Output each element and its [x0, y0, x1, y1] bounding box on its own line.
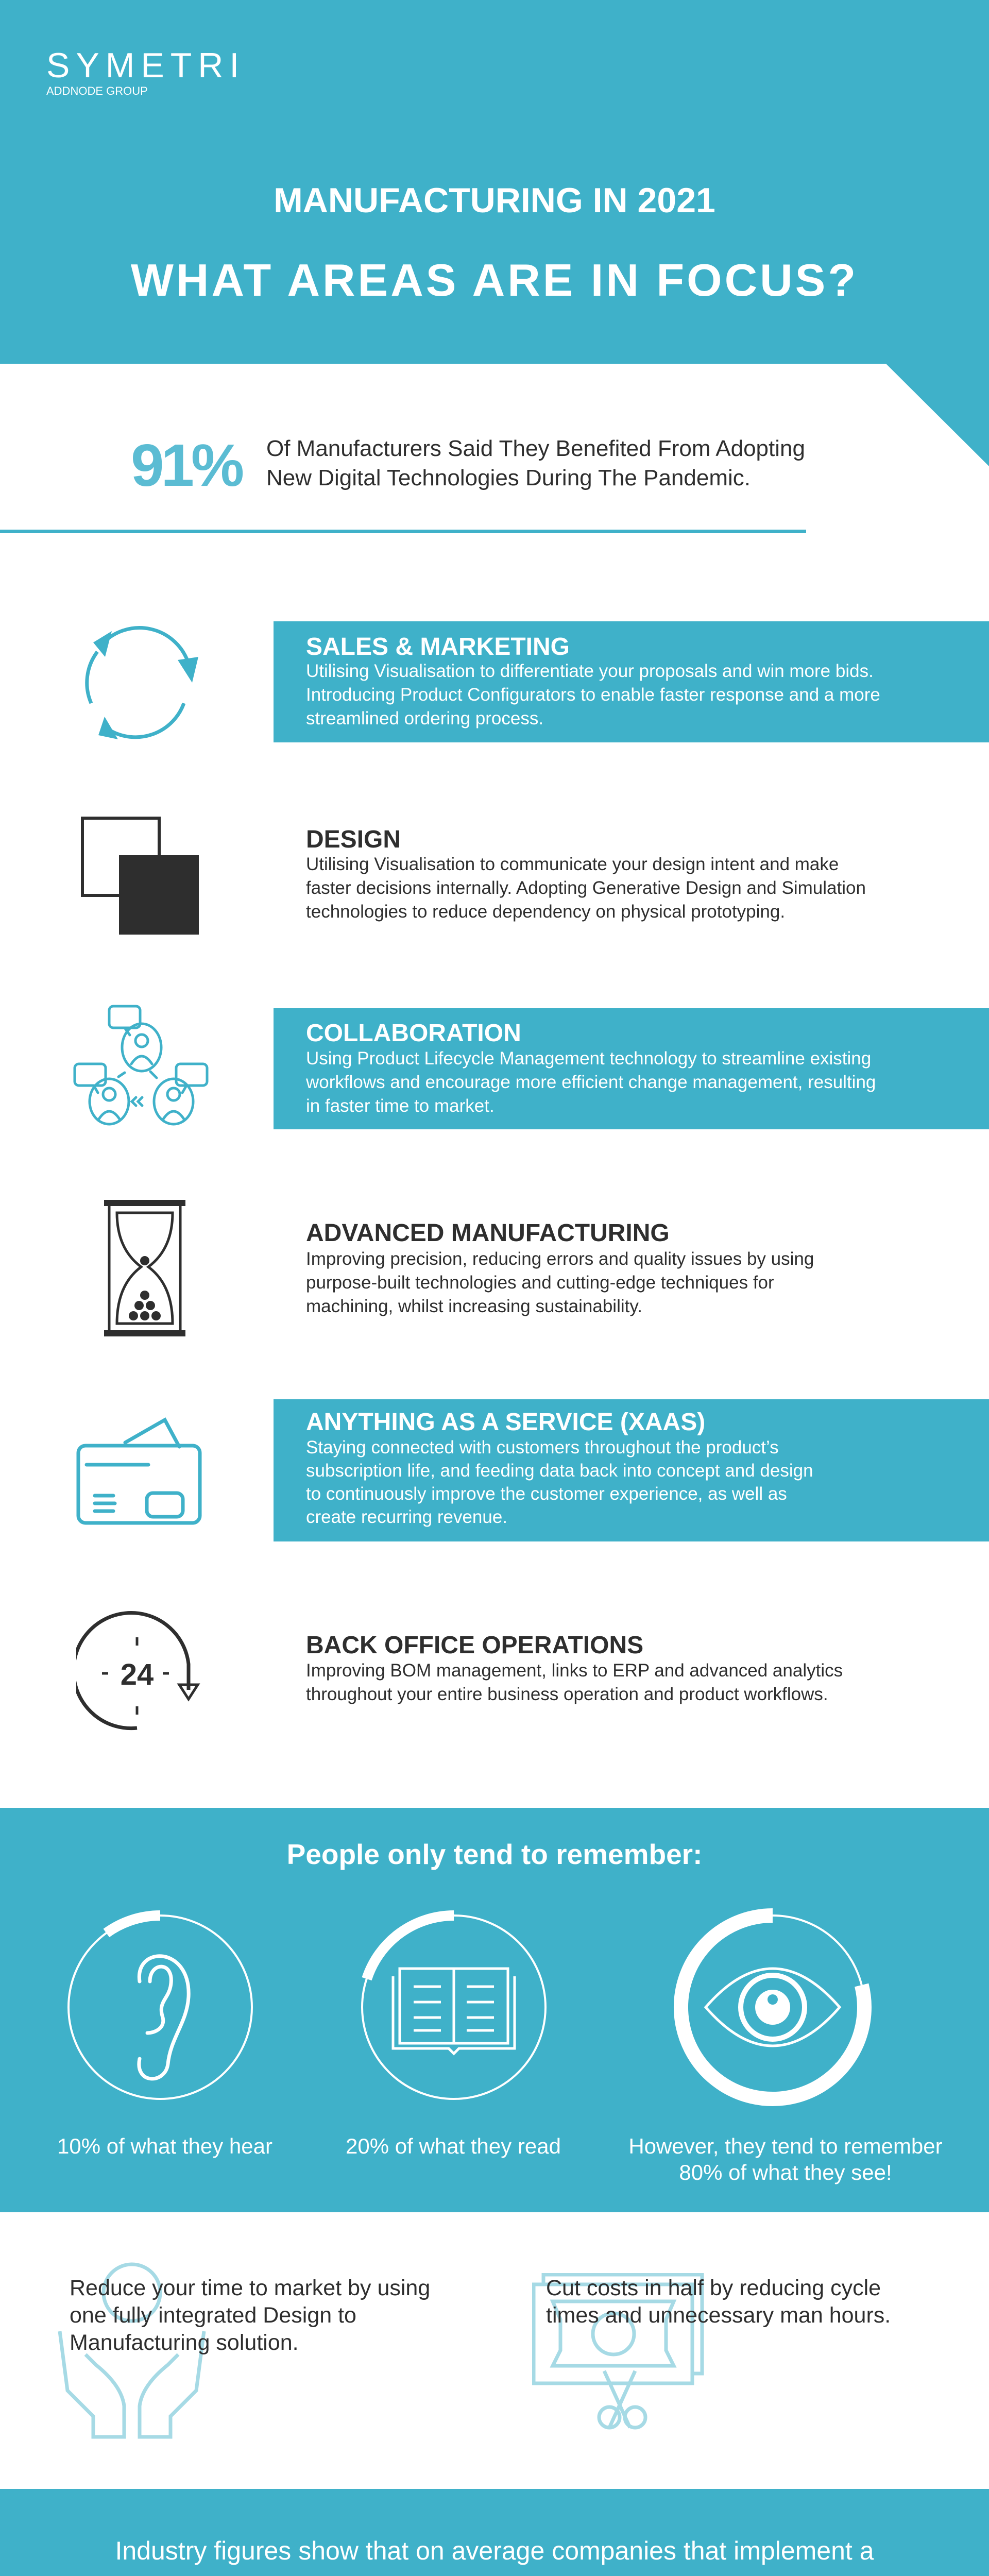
- icon: 24 clock: 24: [121, 1658, 154, 1691]
- panel: sales & marketing: SALES & MARKETING: [306, 633, 570, 660]
- chart: ear 10%: [67, 1910, 253, 2100]
- icon: card wallet: [76, 1417, 202, 1525]
- icon: cycle arrows: [85, 626, 198, 739]
- panel: industry figures: [0, 2489, 989, 2576]
- panel: collaboration: Using Product Lifecycle Management technology to streamline existing: [306, 1048, 871, 1069]
- corner triangle: [886, 364, 989, 466]
- logo top: ADDNODE GROUP: [46, 84, 148, 97]
- label: 80% see: However, they tend to remember: [628, 2134, 943, 2158]
- text: reduce time: Manufacturing solution.: [70, 2330, 299, 2355]
- panel: back office: Improving BOM management, links to ERP and advanced analytics: [306, 1660, 843, 1681]
- panel: sales & marketing: Utilising Visualisation to differentiate your proposals and win more bids.: [306, 661, 874, 681]
- panel: xaas: to continuously improve the customer experience, as well as: [306, 1484, 787, 1504]
- header background: [0, 0, 989, 364]
- icon: hands: [58, 2263, 206, 2439]
- panel: collaboration: in faster time to market.: [306, 1096, 494, 1116]
- panel: xaas: [274, 1399, 989, 1541]
- panel: sales & marketing: streamlined ordering process.: [306, 708, 543, 728]
- icon: money scissors: [532, 2273, 704, 2430]
- stat 91%: New Digital Technologies During The Pandemic.: [266, 465, 751, 490]
- text: reduce time: one fully integrated Design to: [70, 2303, 356, 2328]
- panel: collaboration: workflows and encourage more efficient change management, resulting: [306, 1072, 876, 1092]
- subtitle: MANUFACTURING IN 2021: [274, 181, 715, 220]
- stat 91%: [131, 432, 805, 499]
- title: WHAT AREAS ARE IN FOCUS?: [131, 255, 858, 306]
- panel: advanced manufacturing: purpose-built technologies and cutting-edge techniques for: [306, 1273, 774, 1293]
- text: reduce time: Reduce your time to market by using: [70, 2276, 430, 2300]
- icon: design squares: [81, 817, 199, 935]
- panel: xaas: Staying connected with customers throughout the product’s: [306, 1437, 779, 1458]
- text: cut costs: [546, 2276, 891, 2328]
- panel: sales & marketing: [274, 621, 989, 742]
- logo top: SYMETRI: [46, 46, 245, 85]
- panel: back office: throughout your entire business operation and product workflows.: [306, 1684, 828, 1704]
- icon: 24 clock: [76, 1611, 200, 1730]
- panel: xaas: create recurring revenue.: [306, 1507, 507, 1527]
- panel: design: technologies to reduce dependency on physical prototyping.: [306, 902, 785, 922]
- label: 80% see: 80% of what they see!: [679, 2160, 892, 2184]
- icon: hourglass: [104, 1200, 185, 1336]
- stat 91%: 91%: [131, 432, 241, 499]
- icon: collaboration people: [73, 1005, 208, 1125]
- panel: back office: [306, 1632, 843, 1704]
- label: 80% see: [628, 2134, 943, 2184]
- panel: back office: BACK OFFICE OPERATIONS: [306, 1632, 643, 1659]
- text: cut costs: times and unnecessary man hours.: [546, 2303, 891, 2328]
- panel: xaas: subscription life, and feeding data back into concept and design: [306, 1461, 813, 1481]
- stat 91%: Of Manufacturers Said They Benefited From Adopting: [266, 436, 805, 461]
- panel: advanced manufacturing: [306, 1219, 814, 1316]
- chart: book 20%: [361, 1910, 547, 2100]
- panel: design: Utilising Visualisation to communicate your design intent and make: [306, 854, 839, 874]
- panel: people remember: [0, 1808, 989, 2212]
- text: reduce time: [70, 2276, 430, 2355]
- panel: design: DESIGN: [306, 826, 401, 853]
- panel: collaboration: COLLABORATION: [306, 1020, 521, 1047]
- panel: xaas: ANYTHING AS A SERVICE (XAAS): [306, 1409, 705, 1436]
- panel: advanced manufacturing: machining, whilst increasing sustainability.: [306, 1296, 642, 1316]
- heading: People only tend to remember:: [287, 1838, 702, 1870]
- panel: advanced manufacturing: ADVANCED MANUFACTURING: [306, 1219, 670, 1247]
- label: 20% read: 20% of what they read: [346, 2134, 561, 2158]
- panel: sales & marketing: Introducing Product Configurators to enable faster response and a more: [306, 685, 880, 705]
- panel: collaboration: [274, 1008, 989, 1129]
- panel: design: faster decisions internally. Adopting Generative Design and Simulation: [306, 878, 866, 898]
- chart: eye 80%: [674, 1908, 872, 2106]
- panel: advanced manufacturing: Improving precision, reducing errors and quality issues by using: [306, 1249, 814, 1269]
- panel: industry figures: Industry figures show that on average companies that implement a: [115, 2536, 874, 2565]
- underline: [0, 530, 806, 533]
- panel: design: [306, 826, 866, 922]
- label: 10% hear: 10% of what they hear: [57, 2134, 272, 2158]
- text: cut costs: Cut costs in half by reducing cycle: [546, 2276, 881, 2300]
